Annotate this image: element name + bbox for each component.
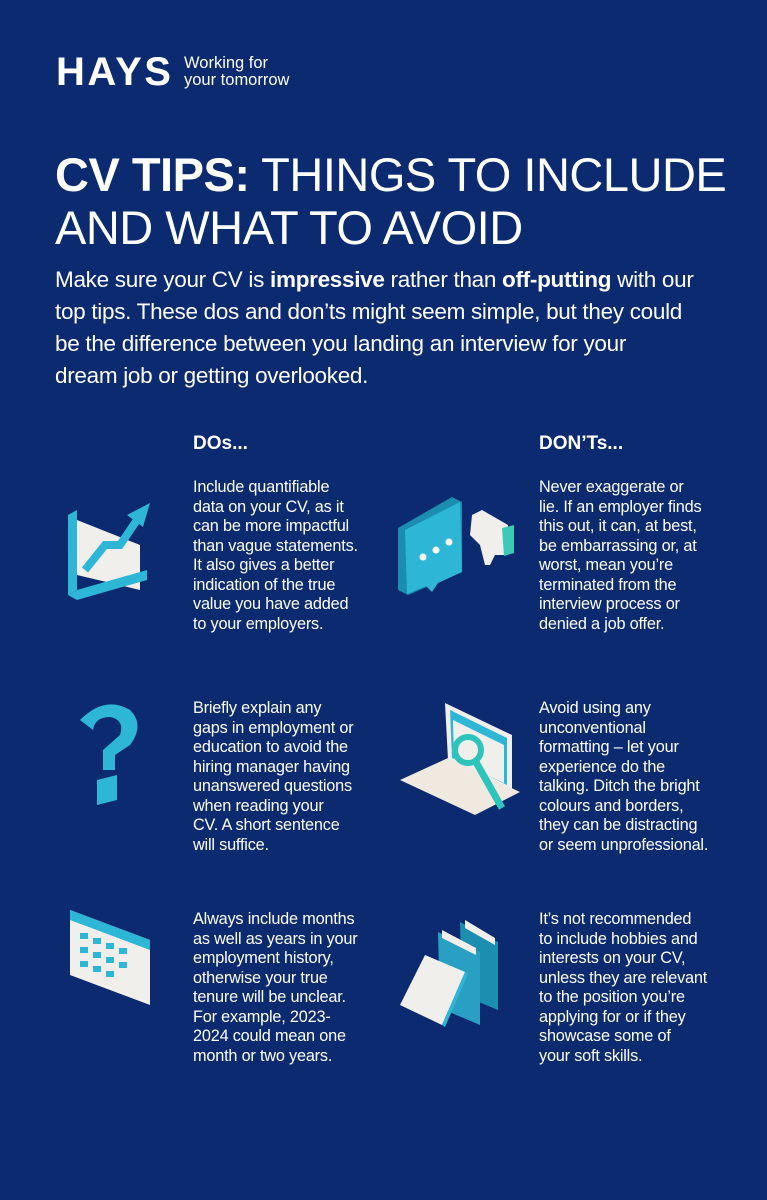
text: dont 1: interview process or (539, 595, 680, 613)
intro text: Make sure your CV is impressive rather than off-putting with our (55, 267, 694, 292)
text: dont 1: denied a job offer. (539, 614, 664, 632)
text: do 3: otherwise your true (193, 968, 328, 986)
icon: chart (68, 503, 150, 600)
text: dont 2: Avoid using any (539, 699, 651, 717)
text: dont 3: It’s not recommended (539, 910, 691, 928)
text: dont 2: colours and borders, (539, 796, 683, 814)
text: dont 1: terminated from the (539, 576, 676, 594)
intro text: be the difference between you landing an interview for your (55, 331, 626, 356)
text: do 2: unanswered questions (193, 777, 352, 795)
text: do 1 (193, 478, 358, 632)
text: do 2 (193, 699, 354, 854)
text: do 1: value you have added (193, 595, 348, 613)
intro text: top tips. These dos and don’ts might seem simple, but they could (55, 299, 682, 324)
text: dont 2: unconventional (539, 718, 646, 736)
title: AND WHAT TO AVOID (55, 201, 523, 254)
icon: calendar (70, 910, 150, 1005)
title (55, 148, 726, 254)
text: dont 1: be embarrassing or, at (539, 536, 697, 554)
text: do 3: 2024 could mean one (193, 1027, 346, 1045)
text: dont 1: this out, it can, at best, (539, 517, 697, 535)
text: do 2: will suffice. (193, 836, 269, 854)
text: dont 3: interests on your CV, (539, 949, 685, 967)
logo (56, 50, 290, 94)
text: do 2: CV. A short sentence (193, 816, 340, 834)
logo tagline: Working for (184, 54, 268, 72)
text: dont 3: unless they are relevant (539, 968, 707, 986)
text: dont 1: Never exaggerate or (539, 478, 684, 496)
icon: question mark (80, 704, 138, 805)
text: do 3 (193, 910, 358, 1064)
text: dont 3: to the position you’re (539, 988, 685, 1006)
text: do 3: For example, 2023- (193, 1008, 331, 1026)
text: dont 2: they can be distracting (539, 816, 697, 834)
text: do 2: Briefly explain any (193, 699, 321, 717)
text: do 1: It also gives a better (193, 556, 334, 574)
logo tagline (184, 54, 290, 89)
text: dont 1 (539, 478, 702, 632)
text: do 3: as well as years in your (193, 930, 357, 948)
text: do 1: data on your CV, as it (193, 498, 344, 516)
text: dont 3: applying for or if they (539, 1008, 686, 1026)
text: do 2: education to avoid the (193, 738, 348, 756)
title: CV TIPS: THINGS TO INCLUDE (55, 148, 726, 201)
text: dont 1: lie. If an employer finds (539, 498, 701, 516)
text: dont 2 (539, 699, 708, 854)
text: do 2: when reading your (193, 796, 324, 814)
text: dont 2: or seem unprofessional. (539, 836, 708, 854)
text: do 2: hiring manager having (193, 758, 350, 776)
text: do 3: employment history, (193, 949, 334, 967)
text: dont 2: talking. Ditch the bright (539, 777, 700, 795)
text: do 3: month or two years. (193, 1046, 332, 1064)
text: dont 1: worst, mean you’re (539, 556, 673, 574)
text: do 1: can be more impactful (193, 517, 349, 535)
text: dont 2: formatting – let your (539, 738, 679, 756)
logo wordmark: HAYS (56, 50, 173, 94)
logo tagline: your tomorrow (184, 71, 289, 89)
text: dont 3: to include hobbies and (539, 930, 698, 948)
text: dont 3: your soft skills. (539, 1046, 642, 1064)
text: do 1: indication of the true (193, 576, 335, 594)
text: do 3: tenure will be unclear. (193, 988, 346, 1006)
icon: books (400, 920, 498, 1027)
intro text (55, 267, 694, 388)
text: do 1: than vague statements. (193, 536, 358, 554)
text: dont 3: showcase some of (539, 1027, 671, 1045)
heading: DOs: DOs... (193, 433, 248, 454)
text: do 1: Include quantifiable (193, 478, 329, 496)
icon: speech bubble and thumbs down (398, 497, 514, 595)
text: do 2: gaps in employment or (193, 718, 354, 736)
icon: laptop with magnifier (400, 703, 520, 815)
text: dont 3 (539, 910, 708, 1064)
text: do 3: Always include months (193, 910, 354, 928)
heading: DON'Ts: DON’Ts... (539, 433, 623, 454)
text: do 1: to your employers. (193, 614, 323, 632)
intro text: dream job or getting overlooked. (55, 363, 368, 388)
text: dont 2: experience do the (539, 758, 665, 776)
